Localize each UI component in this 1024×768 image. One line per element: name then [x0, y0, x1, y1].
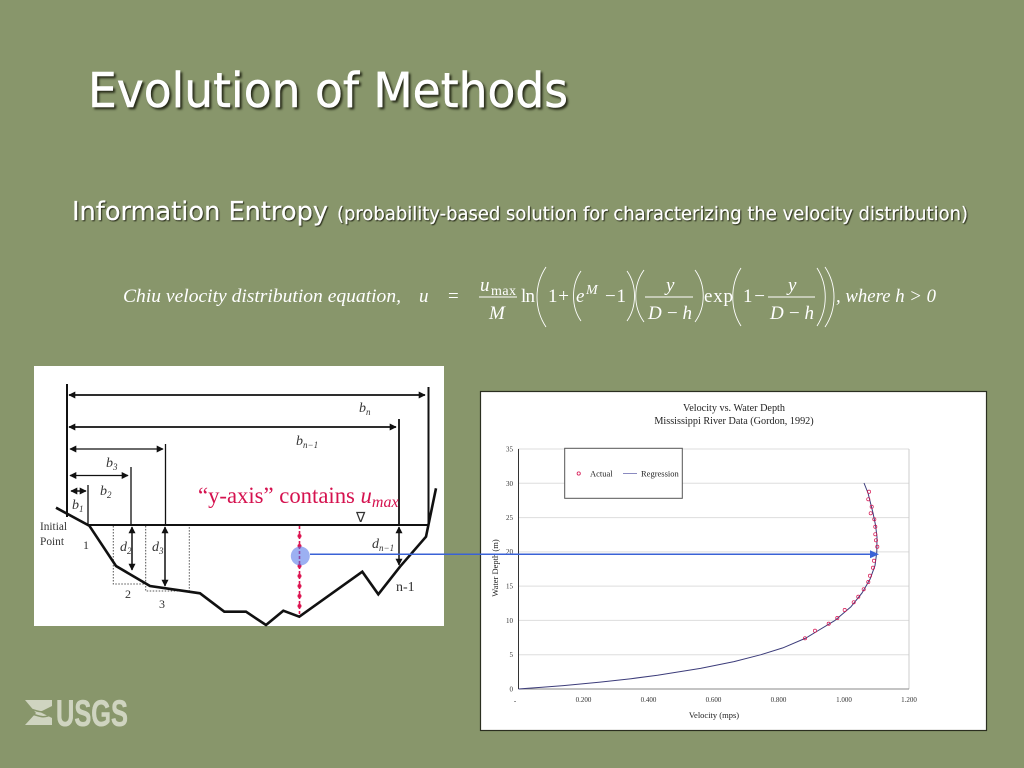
subheading: Information Entropy: [72, 197, 328, 227]
diagram labels: b: [359, 401, 366, 416]
diagram labels: b: [100, 484, 107, 499]
arrow: umax to chart: [310, 550, 879, 558]
chart title: [654, 403, 814, 427]
legend: Regression: [641, 468, 680, 478]
equation: ln: [521, 286, 536, 307]
width arrows b1 to bn: [69, 395, 425, 491]
equation: u: [419, 286, 428, 307]
chart title: Mississippi River Data (Gordon, 1992): [654, 416, 814, 427]
chart title: Velocity vs. Water Depth: [683, 403, 785, 414]
diagram labels: [40, 401, 415, 611]
gridlines: [518, 449, 909, 655]
equation: [123, 267, 936, 327]
river bed profile: [56, 488, 436, 625]
equation: , where h > 0: [836, 286, 936, 307]
actual data markers: [803, 490, 879, 640]
diagram labels: b: [72, 498, 79, 513]
x tick labels: 1.000: [836, 696, 852, 704]
diagram labels: b: [106, 456, 113, 471]
diagram labels: ∇: [355, 511, 366, 526]
y-axis red dotted line: [298, 526, 302, 616]
equation: Chiu velocity distribution equation,: [123, 286, 401, 307]
blue marker circle: [291, 546, 310, 566]
diagram labels: 3: [159, 597, 165, 611]
y tick labels: 35: [506, 446, 514, 454]
x tick labels: -: [514, 697, 517, 705]
legend: [565, 448, 682, 498]
diagram labels: Point: [40, 534, 65, 548]
equation: M: [585, 283, 599, 298]
diagram labels: n−1: [303, 440, 318, 450]
diagram labels: 1: [79, 504, 84, 514]
x tick labels: 1.200: [901, 696, 917, 704]
y tick labels: 5: [510, 651, 514, 659]
subheading: (probability-based solution for characterizing the velocity distribution): [337, 203, 968, 225]
diagram labels: 2: [125, 587, 131, 601]
diagram labels: d: [372, 537, 379, 552]
equation: D − h: [647, 303, 692, 324]
equation: M: [488, 303, 506, 324]
equation: =: [448, 286, 459, 307]
panel: channel cross-section diagram: [34, 366, 444, 626]
x tick labels: 0.400: [641, 696, 657, 704]
diagram labels: 3: [112, 462, 118, 472]
title: Evolution of Methods: [88, 63, 568, 119]
subheading: [72, 197, 968, 227]
diagram labels: d: [152, 540, 159, 555]
x tick labels: 0.200: [576, 696, 592, 704]
equation: y: [664, 275, 675, 296]
y tick labels: [506, 446, 514, 694]
x tick labels: 0.800: [771, 696, 787, 704]
diagram labels: Initial: [40, 519, 68, 533]
diagram labels: 3: [158, 546, 164, 556]
equation: e: [576, 286, 584, 307]
y tick labels: 0: [510, 686, 514, 694]
x tick labels: [514, 696, 917, 705]
legend: Actual: [590, 468, 613, 478]
axes: [518, 449, 520, 689]
y tick labels: 20: [506, 548, 514, 556]
diagram labels: n: [366, 407, 371, 417]
diagram labels: n-1: [396, 580, 415, 595]
equation: 1+: [548, 286, 569, 307]
diagram labels: b: [296, 434, 303, 449]
diagram labels: 2: [107, 490, 112, 500]
icon: waves: [25, 700, 52, 725]
USGS logo: [25, 693, 128, 734]
depth arrows d2, d3, dn-1: [132, 527, 399, 586]
equation: D − h: [769, 303, 814, 324]
channel verticals and water surface: [67, 384, 428, 525]
y tick labels: 30: [506, 480, 514, 488]
y axis title: Water Depth (m): [490, 539, 500, 597]
y tick labels: 10: [506, 617, 514, 625]
USGS logo: USGS: [56, 693, 128, 734]
sub-section dotted boxes: [113, 526, 189, 591]
y tick labels: 25: [506, 514, 514, 522]
equation: y: [786, 275, 797, 296]
equation: u: [480, 275, 490, 296]
diagram labels: d: [120, 540, 127, 555]
diagram labels: 2: [127, 546, 132, 556]
equation: 1−: [743, 286, 765, 307]
equation: −1: [605, 286, 626, 307]
regression curve: [518, 483, 877, 689]
y-axis label: max: [372, 494, 399, 511]
diagram labels: n−1: [379, 543, 394, 553]
x axis title: Velocity (mps): [689, 710, 739, 720]
panel: velocity chart: [480, 392, 986, 730]
diagram labels: 1: [83, 538, 89, 552]
equation: exp: [704, 286, 733, 307]
y-axis label: “y-axis” contains u: [198, 483, 372, 508]
y tick labels: 15: [506, 582, 514, 590]
equation: max: [491, 284, 516, 299]
x tick labels: 0.600: [706, 696, 722, 704]
